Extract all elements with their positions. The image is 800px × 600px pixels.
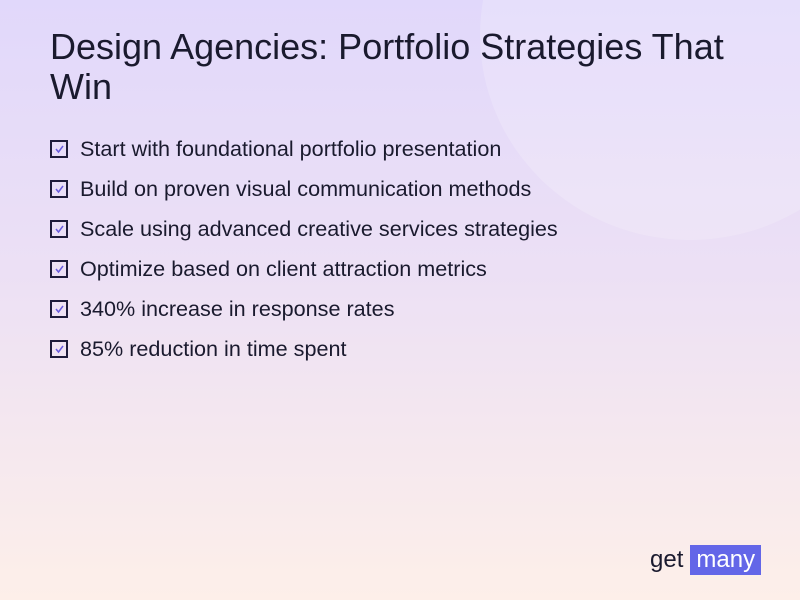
item 5: 340% increase in response rates — [80, 296, 394, 321]
logo: many — [696, 546, 755, 573]
logo — [650, 545, 761, 575]
title: Design Agencies: Portfolio Strategies That Win — [50, 26, 724, 107]
logo: get — [650, 546, 683, 573]
item 1: Start with foundational portfolio presentation — [80, 136, 501, 161]
item 4: Optimize based on client attraction metrics — [80, 256, 487, 281]
item 6: 85% reduction in time spent — [80, 336, 346, 361]
item 3: Scale using advanced creative services strategies — [80, 216, 558, 241]
checklist — [50, 136, 558, 361]
item 2: Build on proven visual communication methods — [80, 176, 531, 201]
